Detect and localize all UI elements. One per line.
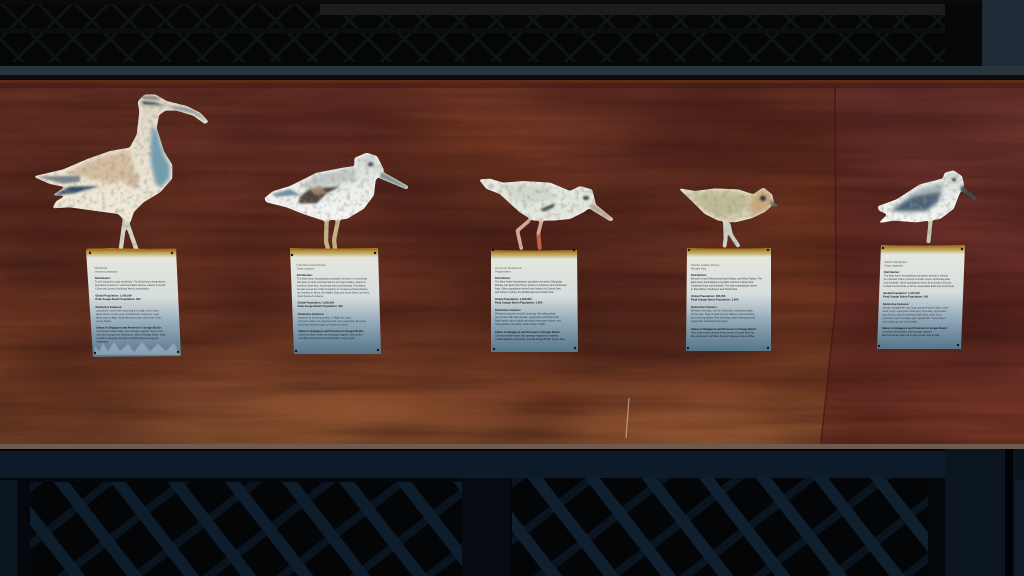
plaque text: Distinctive Features: <box>96 305 122 309</box>
plaque text: Tringa totanus <box>495 270 512 274</box>
plaque text: Global Population: 1,000,000 <box>95 294 132 297</box>
whimbrel dark primaries <box>37 176 80 184</box>
greenshank body <box>265 153 383 220</box>
redshank legs <box>517 220 542 250</box>
plaque text: mud flats and ponds at Sungei Buloh, Aug to April. <box>298 336 355 340</box>
plaque plate <box>86 248 181 357</box>
sandpiper leg <box>928 220 931 243</box>
plaque text: black spots, winter adults are plain brown-grey above, and <box>495 318 561 322</box>
plaque screws <box>687 249 769 349</box>
plaque text: Status in Singapore and Presence in Sungei Buloh: <box>495 330 561 334</box>
plaque text: Status in Singapore and Presence in Sungei Buloh: <box>298 329 364 333</box>
lattice posts <box>0 449 1024 576</box>
plaque text: The East Asian-Australasian population breeds in Mongolia, <box>495 280 563 284</box>
plaque text: Common Redshank <box>495 266 522 270</box>
whimbrel body <box>35 95 208 222</box>
plaque text: mud and mangroves, feeding on crabs at Sungei Buloh. Sept <box>96 333 166 336</box>
sandpiper eye <box>952 178 956 181</box>
plaque text: population breeds in central and East Siberia, winters in South <box>95 283 166 287</box>
plaque text: back, rump, upperparts white-grey. Breeding: upperparts <box>883 309 947 313</box>
bird: common greenshank <box>265 153 408 253</box>
sandpiper bill <box>961 186 977 200</box>
plaque text: to March; passage through mud flats between Aug and <box>96 336 159 340</box>
plaque text: Head stripes on the head contrast dark crown/eye. Legs <box>96 312 160 316</box>
lower lattice left <box>30 482 462 576</box>
plaque text <box>94 266 168 343</box>
plaque text: and Australia. Other populations breed from Eastern Europe <box>884 281 952 284</box>
plaque text: Peak Sungei Buloh Population: 400 <box>95 297 141 301</box>
plaque text: coastal lagoons and ponds. Around Sungei Buloh, Aug to May. <box>495 337 566 341</box>
redshank mottling <box>503 185 557 203</box>
plaque text: Slender straight bill, very long, greenish-green legs. Lower <box>883 306 949 309</box>
plover speckles <box>692 192 750 217</box>
plaque text: and winter in Africa, the Middle East and South Asia. <box>495 290 554 294</box>
plaque text: Whimbrel <box>94 266 108 270</box>
plaque screws <box>89 252 179 354</box>
bird: whimbrel <box>35 95 208 255</box>
plaque text: China and across Southeast Asia to Australasia. <box>95 287 150 290</box>
whimbrel bill <box>165 106 207 122</box>
plaque text: Tringa stagnatilis <box>884 265 904 267</box>
plaque grass strip <box>94 342 180 355</box>
plaque text: Peak Sungei Buloh Population: 300 <box>883 295 929 298</box>
plaque text: Common winter visitor and passage migrant at mudflats, <box>495 334 559 338</box>
lower lattice right <box>512 478 928 576</box>
plaque text: Distinctive Features: <box>883 302 909 306</box>
plaque text: Global Population: 1,000,000 <box>297 301 335 304</box>
plaque screws <box>492 249 576 350</box>
plaque text: Peak Sungei Buloh Population: 400 <box>298 304 343 308</box>
plaque text <box>296 263 370 340</box>
plaque text: Global Population: 1,300,000 <box>495 297 532 301</box>
whimbrel wing <box>67 151 133 183</box>
plaque text: across flanks. <box>96 319 112 323</box>
upper dark lattice background <box>0 0 1024 68</box>
plaque text: Tringa nebularia <box>297 268 315 270</box>
lower dark frame <box>0 449 1024 576</box>
plaque: pacific golden plover <box>686 248 771 351</box>
plaque rust edge <box>87 249 176 251</box>
plaque text: in East Africa, Southwest and South Asia. <box>691 287 738 291</box>
plaque text <box>691 263 763 338</box>
plaque text: southern East Asia, Southeast Asia and Australia. Population <box>297 284 366 287</box>
top right post <box>982 0 1024 68</box>
bird: pacific golden plover <box>680 188 781 248</box>
sandpiper wing <box>890 190 942 212</box>
plaque text: Peak Sungei Buloh Population: 1,000 <box>495 300 543 304</box>
plaque: common greenshank <box>290 248 381 354</box>
plaque text: Marsh Sandpiper <box>884 260 907 264</box>
plaque: common redshank <box>491 249 578 352</box>
plaque text: Numenius phaeopus <box>95 271 118 273</box>
greenshank wing <box>298 187 340 203</box>
plaque text: Status in Singapore and Presence in Sungei Buloh: <box>691 327 757 331</box>
top rail <box>0 66 1024 83</box>
plaque rust edge <box>882 246 964 247</box>
plaque text: grey-brown with dark streaks, upperparts and flanks with <box>495 315 559 319</box>
plaque text: Relatively long thin red bill, long legs. Breeding adults <box>495 312 556 316</box>
plaque text: Distribution: <box>691 273 707 277</box>
plaque text: and a strong yellow. Non-breeding: white underparts and <box>691 316 755 320</box>
plaque text: the ponds and mud flats. Present between Aug and May. <box>691 334 755 338</box>
plaque text <box>882 260 956 337</box>
plaque text: Greenish to brown-grey legs. In flight, the rump <box>298 316 352 319</box>
plaque text: Common winter visitor and passage migrant. Seen at the <box>298 333 363 336</box>
plaque plate <box>491 250 578 352</box>
sandpiper body <box>878 171 963 222</box>
plaque text: Global Population: 1,300,000 <box>883 291 920 295</box>
plaque plate <box>290 248 381 354</box>
whimbrel legs <box>121 218 138 255</box>
plaque text: Uncommon winter visitor and passage migrant. Seen in the <box>96 329 164 333</box>
plaque text: noticeably past tail end in flight. <box>882 320 918 323</box>
plaque text: Breeds in north Siberia and East Alaska, and West Alaska. The <box>691 276 763 280</box>
plaque text: Distribution: <box>884 270 900 274</box>
lower board edge <box>0 444 1024 449</box>
plaque text <box>495 266 567 341</box>
whimbrel blue breast <box>151 125 170 188</box>
plaque: whimbrel <box>86 248 181 357</box>
plaque text: Long down-curved bill measuring the length of the head. <box>96 309 159 312</box>
bird: marsh sandpiper <box>878 171 977 243</box>
plaque plate <box>877 245 965 349</box>
plaque text: and winters in Africa, the Middle East and South West, and from <box>297 291 369 294</box>
plaque text: on the face, back of neck may be different among flocks, <box>691 312 755 316</box>
plaque text: Distribution: <box>495 276 511 280</box>
plaque text: Russia, Far East and China, winters in Southern and Southeast <box>495 283 567 287</box>
plaque text: Found along the coast worldwide. The East Asian-Australasian <box>95 280 166 283</box>
plaque text: Seen at Sungei Buloh at muddy ponds, Aug to May. <box>882 333 940 337</box>
plaque rust edge <box>291 249 377 250</box>
redshank wing mark <box>540 203 555 211</box>
plover legs <box>724 221 739 248</box>
plaque plate <box>686 248 771 351</box>
plaque: marsh sandpiper <box>877 245 965 349</box>
plaque text: grey-brown, reaches buff-grey with black spots more <box>882 313 942 316</box>
plaque text: The East Asian-Australasian population breeds in Central Asia <box>297 277 368 280</box>
greenshank legs <box>326 219 338 253</box>
bird: common redshank <box>480 179 613 250</box>
plaque text: and back white and wing-tips dark, toes projecting. Breeding <box>298 319 367 323</box>
plaque text: and East Central and East Siberia and Kamchatka, winters in <box>297 280 367 284</box>
plover head <box>749 189 772 216</box>
plaque text: Pluvialis fulva <box>691 268 707 270</box>
plaque text: One of the most common birds found in Sungei Buloh at <box>691 330 755 334</box>
plaque text: West Russia to Siberia. <box>297 294 324 298</box>
plaque text: November. <box>97 340 109 343</box>
plaque text: Status in Singapore and Presence in Sungei Buloh: <box>96 326 162 329</box>
greenshank bill <box>379 171 408 189</box>
whimbrel head stripe <box>142 101 165 106</box>
plaque text: Distribution: <box>95 276 111 280</box>
redshank body <box>480 179 595 220</box>
plaque screws <box>291 252 379 352</box>
plaque text: Distribution: <box>297 273 313 277</box>
plaque text: to East Central Asia, in Africa, Australasia East and South Asia. <box>883 284 955 288</box>
plaque text: bluish grey or flight. Body wing and rump white with V-line <box>96 316 162 319</box>
plaque text: Distinctive Features: <box>298 312 324 316</box>
plaque rust edge <box>492 251 576 252</box>
plover eye <box>760 196 766 201</box>
wooden board <box>0 83 1024 445</box>
greenshank eye <box>368 162 373 166</box>
plaque rust edge <box>688 249 770 250</box>
plaque text: Common winter visitor and passage migrant. <box>882 330 933 333</box>
greenshank back <box>300 168 357 190</box>
plaque text: Bill short and dark, thin bill, Breeding: underparts black, <box>691 308 754 312</box>
plaque text: Global Population: 230,000 <box>691 294 726 298</box>
plaque text: to northeast China, winters in South China, Southeast Asia <box>884 277 950 281</box>
plaque screws <box>878 247 963 347</box>
plaque text: Distinctive Features: <box>691 305 718 309</box>
redshank bill <box>590 202 613 221</box>
plaque text: wing patches, streaking, white wings in flight. <box>495 322 546 326</box>
plaque text: breeds across the United Kingdom to Central and East Siberia, <box>297 287 368 291</box>
plover bill <box>770 200 781 208</box>
plaque text: prominent. Non-breeding: plain upperparts. Toes project <box>882 316 946 320</box>
plaque text: Peak Sungei Buloh Population: 2,000 <box>691 298 739 302</box>
plaque text: Pacific Golden Plover <box>691 263 720 267</box>
plaque text: East Asian-Australasian population winters in East Asia, <box>691 280 754 284</box>
plaque text: upperparts speckled brown-gold. <box>691 319 728 323</box>
plaque text: Common Greenshank <box>296 263 326 267</box>
plaque text: adult has blackish spots on breast and back. <box>298 323 349 326</box>
plaque text: The East Asian-Australasian population breeds in Siberia <box>884 274 949 277</box>
plaque text: Distinctive Features: <box>495 308 522 312</box>
redshank eye <box>583 196 589 200</box>
plaque text: Asia. Other populations breed from Iceland to Central Asia <box>495 286 561 290</box>
plaque text: Status in Singapore and Presence in Sungei Buloh: <box>882 326 948 330</box>
plover body <box>680 188 773 222</box>
plaque text: Southeast Asia and Australia. The other populations winter <box>691 284 757 288</box>
